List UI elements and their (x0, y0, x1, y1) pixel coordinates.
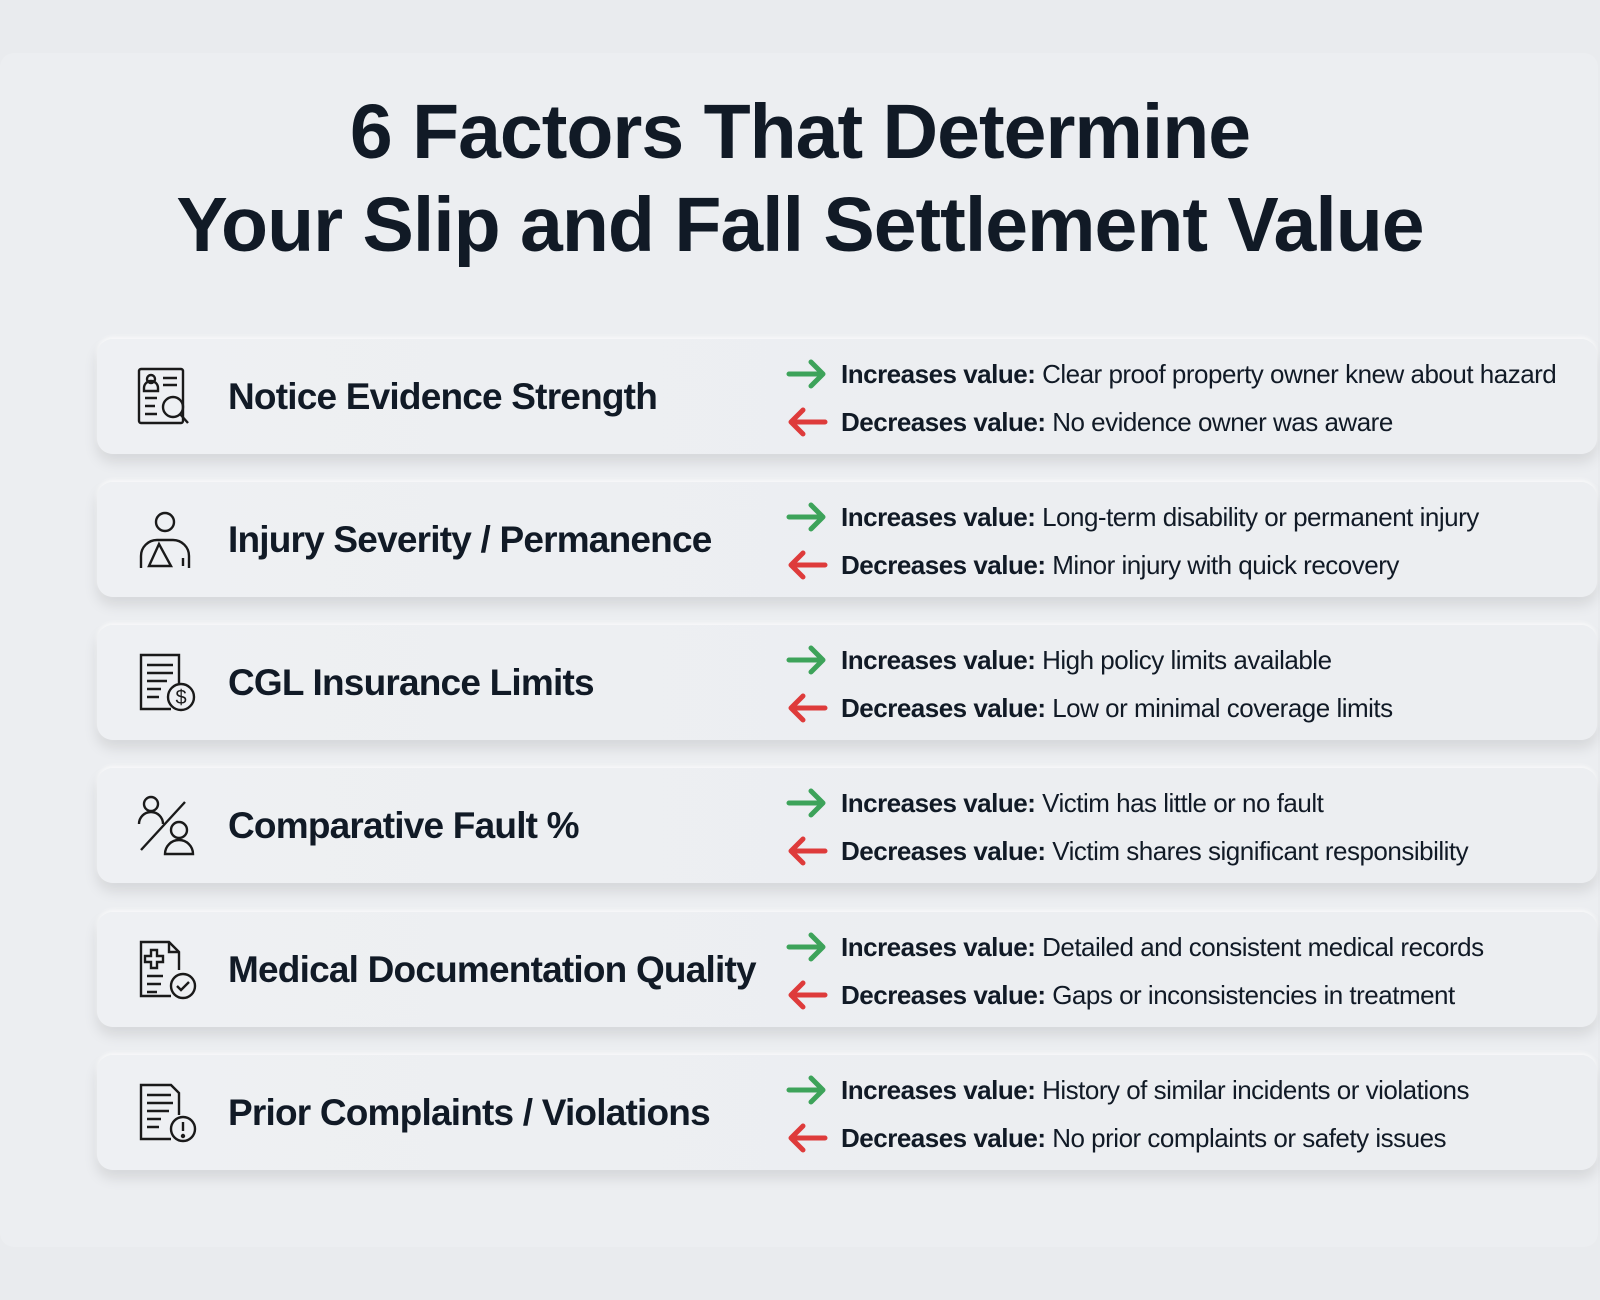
effects: Increases value: History of similar incidents or violations (841, 1075, 1469, 1105)
card: prior complaints (97, 1055, 1597, 1170)
effects (786, 788, 1468, 866)
title: 6 Factors That Determine (350, 89, 1250, 175)
label: Medical Documentation Quality (228, 949, 756, 990)
effects: Increases value: High policy limits available (841, 645, 1332, 675)
effects: Increases value: Long-term disability or permanent injury (841, 502, 1479, 532)
icon: medical record check (140, 940, 196, 1000)
card: injury severity (97, 482, 1597, 597)
effects (786, 1075, 1469, 1153)
effects: Increases value: Victim has little or no fault (841, 788, 1323, 818)
label: Injury Severity / Permanence (228, 519, 712, 560)
label: CGL Insurance Limits (228, 662, 594, 703)
effects (786, 359, 1556, 437)
icon: policy dollar: $ (175, 687, 187, 709)
icon: document warning (140, 1084, 196, 1142)
label: Notice Evidence Strength (228, 376, 657, 417)
effects: Increases value: Detailed and consistent medical records (841, 932, 1484, 962)
effects (786, 645, 1393, 723)
icon: document search (138, 368, 189, 424)
effects: Decreases value: Gaps or inconsistencies in treatment (841, 980, 1455, 1010)
label: Comparative Fault % (228, 805, 579, 846)
effects: Decreases value: Minor injury with quick recovery (841, 550, 1399, 580)
effects: Increases value: Clear proof property owner knew about hazard (841, 359, 1556, 389)
effects (786, 502, 1480, 580)
card: notice evidence (97, 339, 1597, 454)
label: Prior Complaints / Violations (228, 1092, 710, 1133)
effects: Decreases value: Victim shares significant responsibility (841, 836, 1468, 866)
icon: percent people (138, 796, 194, 856)
card: medical documentation (97, 912, 1597, 1027)
effects: Decreases value: No evidence owner was aware (841, 407, 1393, 437)
icon: injured person (140, 512, 190, 568)
effects: Decreases value: No prior complaints or safety issues (841, 1123, 1446, 1153)
effects: Decreases value: Low or minimal coverage limits (841, 693, 1393, 723)
icon: policy dollar (140, 654, 196, 712)
card: comparative fault (97, 768, 1597, 883)
title (176, 89, 1424, 268)
title: Your Slip and Fall Settlement Value (176, 182, 1424, 268)
card: CGL insurance (97, 625, 1597, 740)
effects (786, 932, 1484, 1010)
